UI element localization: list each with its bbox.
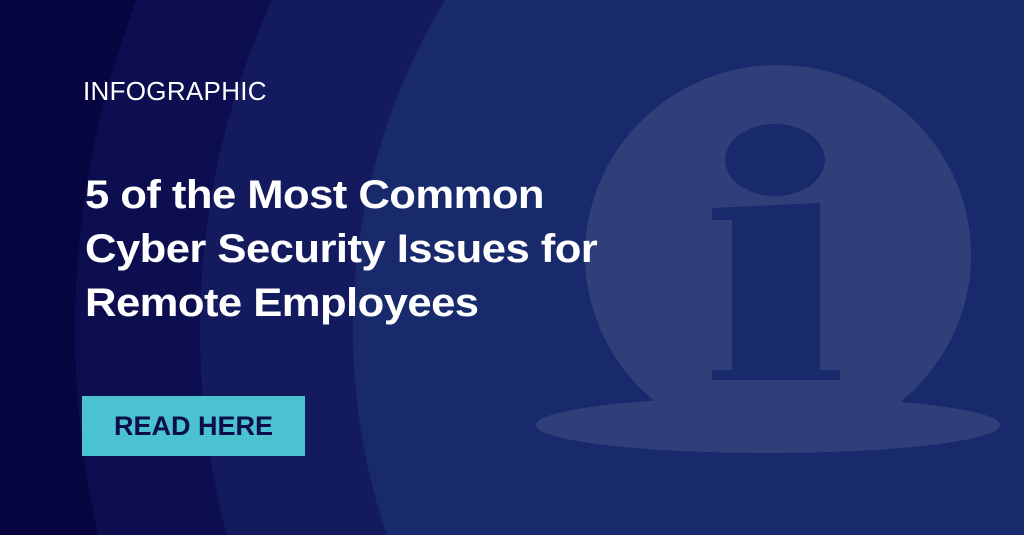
- title: Cyber Security Issues for: [85, 227, 597, 271]
- button: READ HERE: READ HERE: [114, 411, 273, 441]
- button: READ HERE: [82, 396, 305, 456]
- label: INFOGRAPHIC: INFOGRAPHIC: [83, 76, 267, 106]
- title: Remote Employees: [85, 281, 479, 325]
- title: 5 of the Most Common: [85, 173, 544, 217]
- title: [85, 173, 598, 325]
